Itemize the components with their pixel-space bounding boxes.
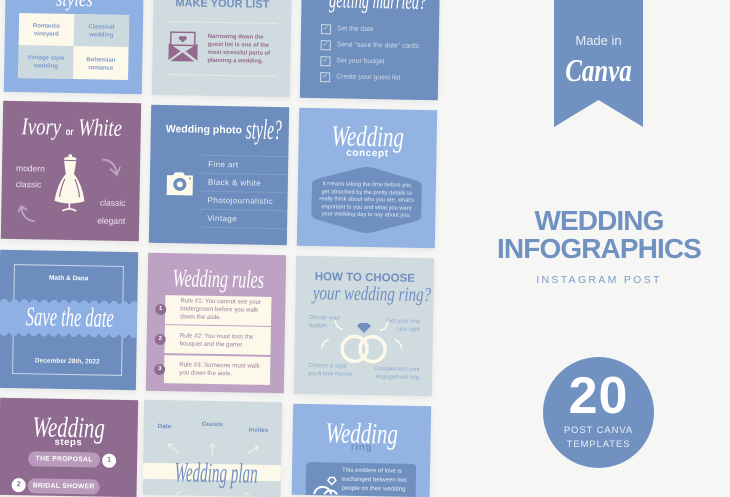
- text: modern classic: [15, 163, 44, 189]
- box: rule 3: Rule #3: Someone must walk: [179, 361, 260, 369]
- text: couple names: Math & Dana: [48, 275, 88, 282]
- heading: wedding script: Wedding: [325, 417, 398, 451]
- item: photojournalistic: [198, 190, 287, 210]
- heading: ring: ring: [351, 442, 372, 453]
- box: rule 3: you down the aisle.: [179, 369, 232, 377]
- title: wedding infographics: INFOGRAPHICS: [497, 233, 701, 264]
- text: vintage style wedding: wedding: [34, 63, 58, 69]
- panel: wedding rules card: [146, 252, 286, 393]
- badge: 3: 3: [158, 365, 161, 372]
- text: romantic vineyard: vineyard: [34, 31, 59, 37]
- text: ring explanation: people on their wedding: [342, 486, 406, 493]
- ribbon: made in canva badge: [554, 0, 643, 127]
- text: ring explanation: This emblem of love is: [342, 468, 402, 475]
- text: choose a style: Choose a style: [308, 363, 347, 369]
- rule 2: [154, 325, 271, 355]
- item: black and white: [198, 172, 288, 192]
- pill: bridal shower: [27, 478, 100, 495]
- panel: wedding plan card: [143, 400, 282, 497]
- text: classical wedding: [88, 24, 115, 38]
- item: save the date cards: Send "save the date" cards: [337, 41, 419, 49]
- icon: wedding dress: [54, 154, 84, 212]
- text: complement ring: Complement your: [374, 366, 420, 372]
- checklist: [320, 24, 419, 82]
- text: post canva templates: TEMPLATES: [567, 438, 630, 450]
- panel: make your list card: [151, 0, 292, 97]
- heading: style script: style?: [245, 114, 282, 146]
- text: decide budget: budget: [309, 322, 327, 328]
- item: set your budget: [320, 56, 385, 66]
- item: create your guest list: [320, 72, 400, 82]
- arrow: top right: [102, 158, 121, 176]
- item: fine art: Fine art: [208, 159, 238, 169]
- text: modern classic: classic: [15, 179, 41, 189]
- item: create your guest list: Create your guest list: [336, 73, 400, 81]
- heading: save the date: Save the date: [25, 301, 114, 333]
- text: complement ring: [374, 366, 420, 380]
- text: guest list explanation: Narrowing down the: [207, 34, 263, 41]
- heading: concept: concept: [346, 147, 388, 159]
- text: classic elegant: elegant: [97, 215, 125, 226]
- arrows: four curved connectors: [321, 320, 402, 349]
- text: complement ring: engagement ring: [376, 373, 419, 380]
- box: rule 3: [164, 355, 270, 384]
- title: wedding infographics: WEDDING: [534, 205, 664, 236]
- heading: ivory or white: Ivory or White: [21, 114, 122, 142]
- text: choose a style: you'll love forever: [308, 370, 353, 377]
- item: black and white: Black & white: [207, 177, 261, 187]
- item: photojournalistic: Photojournalistic: [207, 195, 273, 205]
- badge: 1: [155, 303, 166, 315]
- panel: getting married checklist card: [300, 0, 440, 100]
- text: concept explanation: really think about who you are, what's: [319, 196, 414, 203]
- divider: lower: [166, 74, 276, 77]
- text: modern classic: modern: [15, 163, 44, 174]
- heading: wedding script: Wedding: [331, 120, 404, 153]
- ribbon: scalloped band: [0, 299, 138, 338]
- text: vintage style wedding: Vintage style: [27, 55, 64, 61]
- title: wedding infographics: [497, 205, 701, 264]
- band: cream stripe: [143, 463, 281, 481]
- text: bohemian romance: romance: [88, 65, 113, 71]
- rule 3: [154, 355, 270, 385]
- text: concept explanation: get absorbed by the pretty details to: [321, 188, 412, 196]
- cell: vintage background: [18, 45, 74, 78]
- ribbon shape: [554, 0, 643, 127]
- box: rule 1: bride/groom before you walk: [180, 305, 258, 313]
- heading: wedding plan: Wedding plan: [174, 457, 258, 490]
- rule 1: [155, 295, 272, 326]
- pill: the proposal: THE PROPOSAL: [35, 455, 93, 463]
- number: 20: 20: [569, 366, 628, 424]
- subtitle: instagram post: INSTAGRAM POST: [536, 274, 662, 286]
- item: save the date cards: [320, 40, 419, 50]
- item: set your budget: Set your budget: [336, 57, 385, 65]
- panel: photo style card: [148, 104, 289, 245]
- heading: how to choose: HOW TO CHOOSE: [315, 271, 415, 284]
- panel: wedding steps card: [0, 398, 138, 497]
- text: bohemian romance: [86, 57, 115, 71]
- text: event date: December 28th, 2022: [34, 357, 99, 366]
- text: concept explanation: [319, 181, 414, 218]
- badge: 3: [154, 363, 165, 375]
- text: classic elegant: [97, 198, 126, 226]
- item: set your budget: ✓: [322, 57, 328, 64]
- text: post canva templates: POST CANVA: [564, 424, 633, 436]
- text: guest list explanation: planning a wedding.: [207, 58, 263, 65]
- text: concept explanation: your wedding day to say about you.: [321, 211, 411, 218]
- panel: wedding styles card: [4, 0, 144, 94]
- arrows: lower pair: [176, 491, 250, 496]
- badge: 1: [102, 454, 116, 468]
- text: vintage style wedding: [27, 54, 64, 69]
- icon: interlocked rings: [313, 476, 338, 495]
- grid: four wedding styles: [18, 13, 129, 79]
- arrows: pointing up to labels: [168, 443, 259, 455]
- icon: wedding rings: [340, 322, 387, 364]
- heading: wedding script: Wedding: [32, 411, 105, 445]
- panel: wedding ring card: [292, 404, 431, 497]
- text: canva logo: Canva: [565, 52, 632, 88]
- text: decide budget: [309, 315, 340, 328]
- panel: save the date card: [0, 250, 138, 390]
- text: ring size: Get your ring: [387, 318, 420, 324]
- pill: bridal shower: BRIDAL SHOWER: [32, 482, 95, 490]
- text: concept explanation: important to you and what you want: [321, 203, 411, 211]
- badge: 2: 2: [17, 481, 21, 488]
- text: guest list explanation: most stressful parts of: [207, 50, 270, 57]
- badge: 2: [11, 478, 26, 492]
- heading: wedding photo style: Wedding photo: [165, 123, 242, 136]
- label: date: Date: [158, 423, 171, 430]
- arrow: bottom left: [18, 205, 36, 222]
- badge: 1: 1: [107, 457, 111, 464]
- cell: classical background: [74, 14, 129, 46]
- box: rule 2: [164, 325, 271, 354]
- text: classic elegant: classic: [99, 198, 125, 208]
- text: decide budget: Decide your: [309, 315, 340, 321]
- item: save the date cards: ✓: [323, 41, 329, 48]
- text: ring explanation: exchanged between two: [342, 477, 407, 484]
- label: guests: Guests: [202, 421, 223, 428]
- label: invites: Invites: [249, 427, 268, 434]
- item: set the date: [320, 24, 374, 34]
- icon: camera: [166, 172, 193, 196]
- text: choose a style: [308, 363, 353, 377]
- icon: envelope with photo: [168, 31, 198, 62]
- box: rule 2: Rule #2: You must toss the: [180, 332, 253, 340]
- heading: steps: steps: [54, 437, 82, 448]
- item: create your guest list: ✓: [322, 73, 328, 80]
- text: romantic vineyard: Romantic: [33, 23, 60, 29]
- text: post canva templates: [564, 424, 633, 450]
- text: ring size: size right: [397, 326, 420, 332]
- panel: how to choose ring card: [294, 255, 434, 396]
- badge: 1: 1: [159, 306, 162, 312]
- list: photo styles: [198, 154, 288, 230]
- text: guest list explanation: guest list is one of the: [207, 42, 269, 49]
- text: romantic vineyard: [33, 23, 60, 37]
- pill: the proposal: [28, 451, 100, 468]
- hexagon: explanation: [312, 167, 422, 233]
- divider: upper: [167, 21, 277, 24]
- box: rule 1: Rule #1: You cannot see your: [180, 297, 261, 305]
- badge: 20 post canva templates: [543, 356, 654, 468]
- box: rule 1: [165, 295, 271, 325]
- text: ring explanation: [342, 467, 407, 493]
- text: concept explanation: It means taking the time before you: [322, 181, 411, 188]
- heading: your wedding ring: your wedding ring?: [313, 282, 431, 306]
- heading: wedding rules: Wedding rules: [172, 265, 264, 293]
- badge: 2: [155, 333, 166, 345]
- item: vintage: Vintage: [207, 213, 237, 223]
- box: rule 1: down the aisle.: [180, 313, 221, 321]
- text: guest list explanation: [207, 34, 270, 65]
- item: set the date: Set the date: [337, 25, 374, 33]
- panel: wedding concept card: [296, 107, 437, 248]
- panel: ivory or white card: [0, 101, 141, 241]
- box: ring explanation: [306, 462, 416, 497]
- text: classical wedding: wedding: [89, 32, 114, 38]
- text: made in: Made in: [575, 33, 622, 48]
- badge: 2: 2: [158, 336, 162, 342]
- text: ring size: [386, 318, 420, 332]
- box: rule 2: bouquet and the garter.: [180, 340, 244, 348]
- item: fine art: [199, 154, 288, 174]
- item: set the date: ✓: [323, 25, 329, 32]
- text: classical wedding: Classical: [88, 24, 115, 30]
- item: vintage: [198, 208, 287, 229]
- text: bohemian romance: Bohemian: [86, 57, 115, 63]
- frame: decorative border: [12, 264, 123, 376]
